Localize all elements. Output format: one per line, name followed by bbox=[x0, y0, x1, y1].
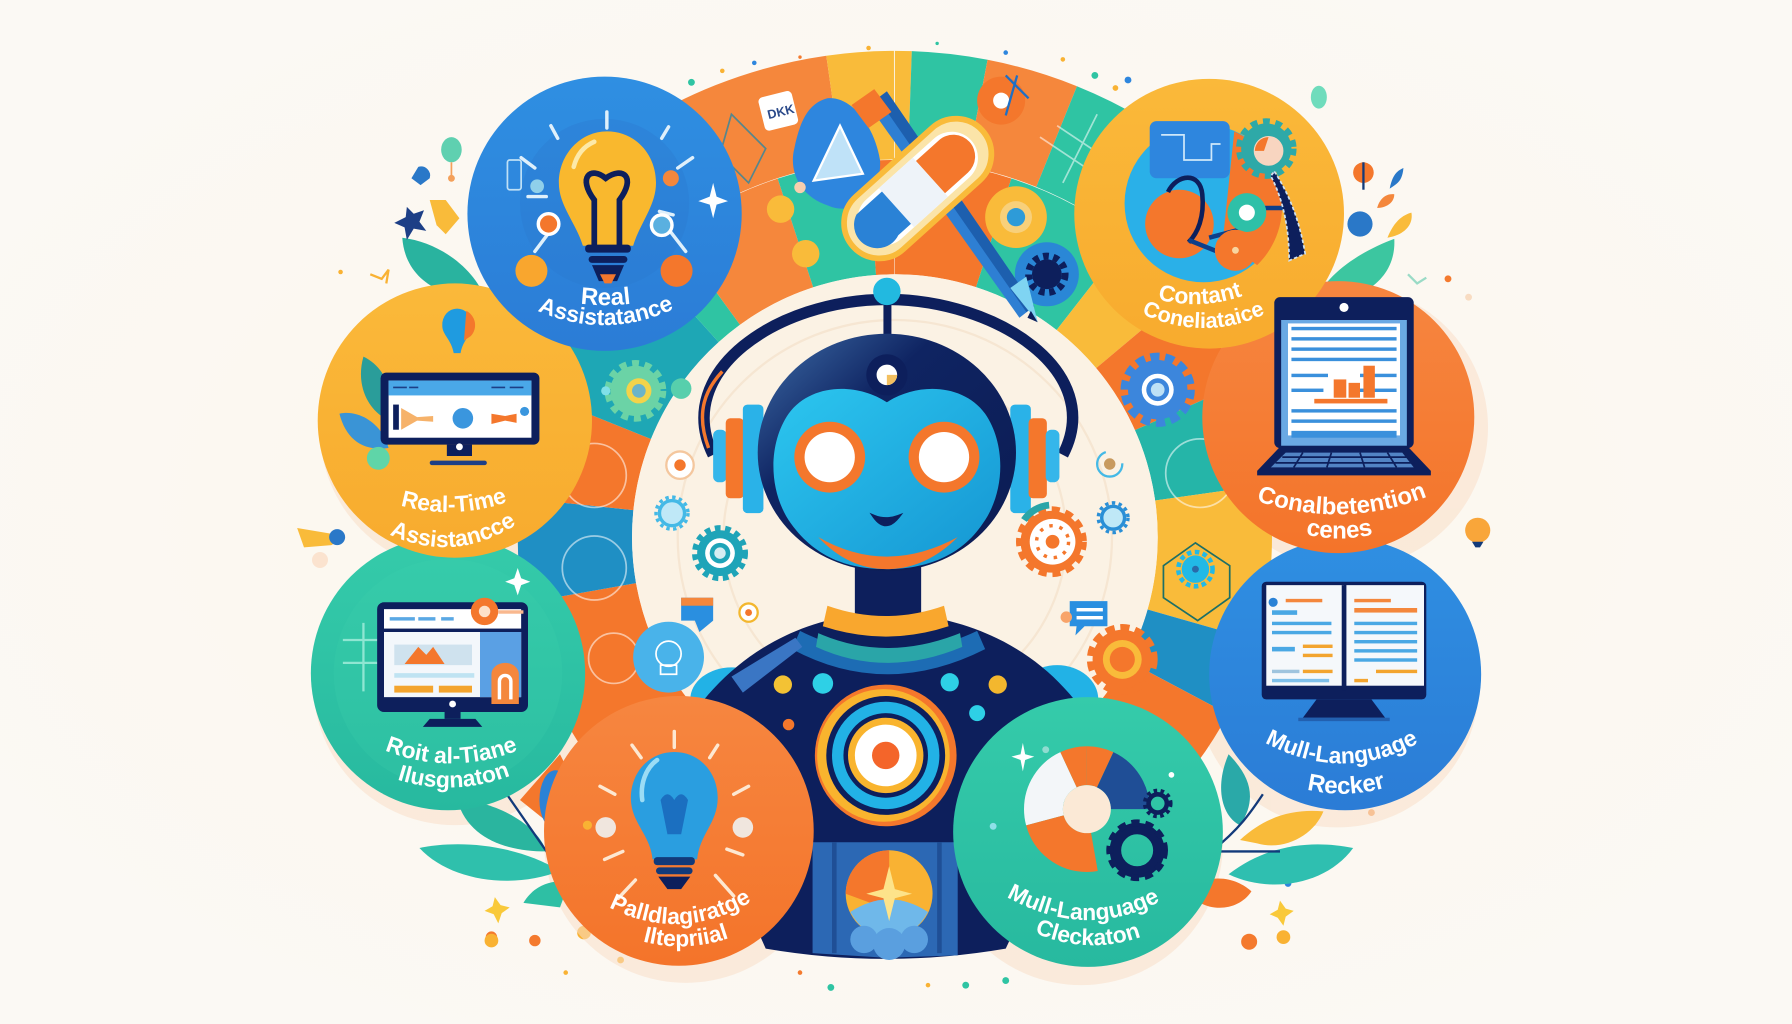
label: Coneliataice bbox=[1144, 302, 1264, 328]
icon: bulb rays bbox=[583, 731, 753, 898]
robot neck and collar bbox=[731, 560, 985, 693]
icon: faint chart grid bbox=[343, 623, 400, 691]
icon: location pin bbox=[442, 309, 475, 353]
robot shoulders bbox=[690, 665, 1098, 734]
star navy bbox=[394, 207, 426, 240]
icon: leaves bbox=[339, 357, 397, 470]
icon: blue cog right bbox=[1125, 357, 1191, 423]
icon: orange half ring bbox=[1223, 131, 1282, 265]
icon: orange badge bbox=[471, 598, 523, 625]
icon: orange white gear bbox=[1019, 505, 1083, 574]
icon: blue shield with triangle bbox=[793, 98, 880, 209]
label: Assistancce bbox=[390, 516, 514, 548]
icon: note tag bbox=[758, 90, 799, 132]
panel: Multi-Language Checker (blue right) bbox=[1209, 544, 1482, 810]
floating icons around the robot bbox=[633, 451, 1230, 693]
leaf bottom left small bbox=[523, 881, 569, 907]
icon: sparkle bbox=[698, 183, 728, 218]
label: Cleckaton bbox=[1037, 920, 1140, 946]
teal leaf behind lower right circles bbox=[1221, 754, 1250, 825]
icon: book on monitor bbox=[1262, 582, 1426, 721]
icon: monitor bbox=[381, 373, 539, 465]
icon: donut chart bbox=[1043, 766, 1130, 853]
label: Real-Time bbox=[402, 490, 506, 512]
icon: striped ribbon bbox=[1271, 171, 1305, 261]
teardrop yellow left bbox=[430, 200, 459, 234]
drops right bbox=[1347, 162, 1412, 238]
balloon teal left bbox=[441, 137, 462, 182]
icon: teal gear bbox=[695, 528, 745, 578]
panel: Multi-Language Integration (orange bottom) bbox=[544, 696, 814, 966]
icon: chat box bbox=[1150, 121, 1230, 178]
leaf bottom right yellow bbox=[1240, 811, 1323, 845]
icon: capsule ring bbox=[829, 104, 1006, 273]
panel: Real Assistance (blue top) bbox=[467, 76, 742, 351]
pin blue left bbox=[411, 166, 430, 185]
icon: yellow ring small bbox=[739, 603, 758, 622]
leaf stems bbox=[503, 789, 1280, 871]
icon: cyan gear bbox=[656, 497, 688, 529]
leaf bottom right orange bbox=[1200, 878, 1251, 908]
panel: Content Collaboration (orange right) bbox=[1202, 281, 1474, 554]
icon: navy gear bbox=[1015, 242, 1079, 306]
label: Palldlagiratge bbox=[610, 892, 750, 928]
icon: big orange gear bbox=[1090, 627, 1154, 691]
leaf bottom left large bbox=[419, 844, 560, 881]
icon: bulb rays and nodes bbox=[507, 112, 693, 251]
cream inner disc bbox=[632, 274, 1158, 800]
peach halos behind circles bbox=[313, 286, 1488, 985]
label: Conalbetention bbox=[1259, 486, 1426, 514]
robot chest target bbox=[815, 685, 957, 826]
icon: swirl ring right bbox=[1097, 451, 1122, 477]
icon: orange ball with navy arc bbox=[1145, 178, 1214, 258]
label: cenes bbox=[1308, 522, 1372, 538]
drop teal right bbox=[1311, 86, 1327, 109]
robot head bbox=[758, 334, 1016, 571]
icon: gear with orange core bbox=[1239, 121, 1294, 176]
panel: Content Consistency (yellow top right) bbox=[1074, 78, 1344, 349]
small bulb left bbox=[297, 528, 345, 547]
robot lower panel bbox=[813, 842, 958, 960]
sparkles bbox=[485, 897, 510, 923]
panel: Real-Time Assistance (yellow left) bbox=[318, 283, 592, 558]
icon: blue small gear bbox=[1098, 503, 1128, 533]
icon: orange dots bbox=[515, 255, 693, 287]
icon: laptop bbox=[1257, 297, 1431, 475]
leaf bottom left upper bbox=[457, 800, 546, 851]
label: Mull-Language bbox=[1266, 729, 1416, 767]
label: Assistatance bbox=[538, 298, 672, 326]
icons: yellow balls bbox=[767, 182, 819, 267]
label: Contant bbox=[1160, 282, 1242, 304]
icon: cyan bulb circle bbox=[633, 622, 704, 693]
label: Ilusgnaton bbox=[398, 765, 510, 792]
robot bbox=[674, 278, 1103, 960]
leaf top left bbox=[402, 238, 486, 299]
robot eyes bbox=[794, 422, 979, 493]
robot headband bbox=[704, 299, 1073, 455]
label: Roit al-Tiane bbox=[386, 736, 516, 764]
leaf bottom right large bbox=[1229, 844, 1353, 885]
icon: chat bubble right bbox=[1061, 601, 1107, 635]
label: Mull-Language bbox=[1008, 884, 1158, 924]
robot headband orange inner bbox=[702, 371, 722, 448]
icon: pencil bbox=[851, 89, 1038, 322]
icon: note tag: DKK bbox=[766, 102, 796, 122]
robot chest dots bbox=[774, 673, 1007, 730]
wheel line details bbox=[562, 114, 1234, 683]
radial colour wheel bbox=[463, 105, 1327, 969]
label: Real bbox=[582, 286, 630, 306]
icon: ring target left bbox=[666, 451, 694, 479]
panel: Real-Time Integration (teal left) bbox=[310, 546, 586, 810]
icon: green gear bbox=[601, 363, 691, 418]
icon: monitor bbox=[377, 602, 528, 727]
icon: hex cyan gear in wheel bbox=[1163, 543, 1230, 621]
icon: sparkle bbox=[505, 568, 530, 595]
small bulb right bbox=[1465, 518, 1490, 547]
robot antenna bbox=[873, 278, 901, 352]
robot body bbox=[674, 611, 1103, 959]
icon: connected nodes bbox=[1189, 193, 1291, 271]
leaf top right bbox=[1314, 239, 1394, 303]
icon: orange tag bbox=[491, 663, 519, 704]
label: Recker bbox=[1308, 774, 1383, 794]
robot ear muffs bbox=[713, 405, 1059, 513]
icon: chat bubble left bbox=[681, 598, 713, 632]
icon: network orange node bbox=[977, 75, 1029, 125]
robot forehead light bbox=[866, 354, 907, 395]
decorative dots and confetti bbox=[312, 42, 1472, 991]
panel: Multi-Language Checklist (teal bottom) bbox=[953, 697, 1223, 967]
icon: cyan disc bbox=[1125, 125, 1282, 282]
leaves and outside decorations bbox=[297, 86, 1490, 926]
icon: yellow ring bbox=[985, 186, 1047, 248]
label: Iltepriial bbox=[644, 922, 728, 952]
robot smile bbox=[818, 517, 958, 569]
icon: blue bulb bbox=[631, 752, 718, 889]
scraps behind lower left circles bbox=[520, 754, 583, 830]
icon: sparkle and dots bbox=[990, 743, 1174, 830]
icon: yellow light bulb bbox=[559, 131, 656, 283]
robot face bbox=[773, 389, 1000, 569]
icon: navy gears bbox=[1110, 791, 1170, 878]
